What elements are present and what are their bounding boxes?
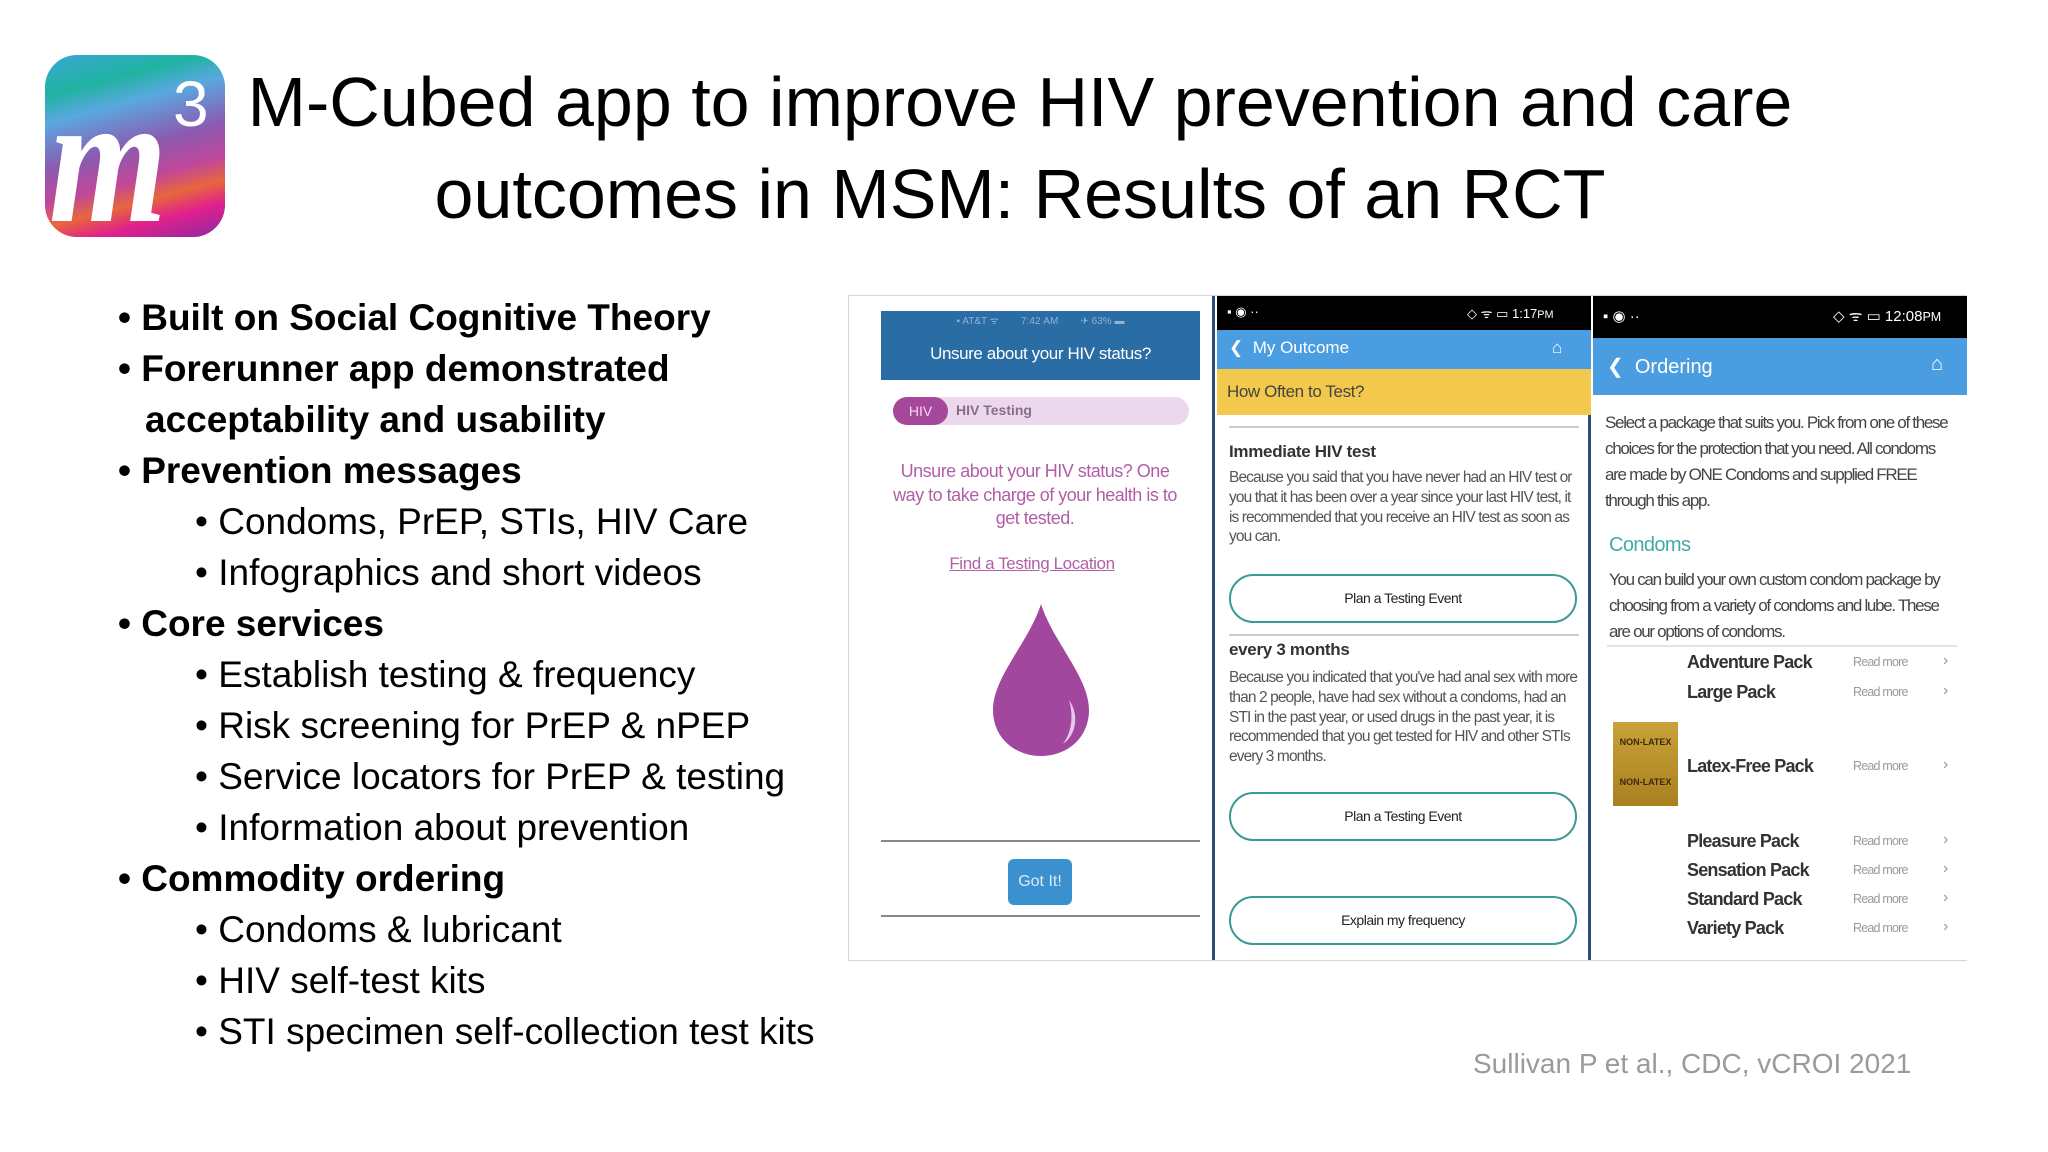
button: explain	[1229, 896, 1577, 945]
link: Find a Testing Location	[949, 554, 1115, 573]
title: outcomes in MSM: Results of an RCT	[435, 155, 1605, 233]
condom list: Sensation Pack	[1687, 860, 1809, 880]
condom list: Variety Pack	[1687, 918, 1783, 938]
condom list: ›	[1943, 652, 1948, 669]
title: M-Cubed app to improve HIV prevention and care	[248, 63, 1792, 141]
condom list: Read more	[1853, 655, 1908, 669]
bullet list: acceptability and usability	[145, 399, 606, 440]
button: got it: Got It!	[1018, 873, 1062, 890]
condom list: ›	[1943, 831, 1948, 848]
header bar	[881, 311, 1200, 380]
condom list: ›	[1943, 918, 1948, 935]
button: explain: Explain my frequency	[1341, 912, 1465, 928]
bullet list: • Commodity ordering	[118, 858, 505, 899]
button: plan 2: Plan a Testing Event	[1344, 808, 1462, 824]
condom list: ›	[1943, 860, 1948, 877]
condom list: ›	[1943, 756, 1948, 773]
screen 2: my outcome: every 3 months	[1229, 640, 1350, 659]
blue header: ❮ My Outcome	[1229, 338, 1349, 357]
logo: m3 app icon: 3	[173, 68, 209, 140]
screen 3: ordering: ▪ ◉ ··	[1603, 308, 1640, 325]
screen 3: ordering: ◇ ᯤ ▭ 12:08PM	[1833, 308, 1941, 325]
blue header: ⌂	[1552, 338, 1562, 357]
screen 3: ordering: Condoms	[1609, 534, 1690, 556]
screen 1: HIV testing	[849, 296, 1215, 960]
condom list: Read more	[1853, 759, 1908, 773]
condom list: Read more	[1853, 863, 1908, 877]
condom list: Read more	[1853, 892, 1908, 906]
icon: non-latex package	[1613, 722, 1678, 806]
condom list: Read more	[1853, 834, 1908, 848]
button: plan: Plan a Testing Event	[1344, 590, 1462, 606]
screen 3: ordering: You can build your own custom condom package by choosing from a variety of condoms and lube. These are our options of condoms.	[1609, 570, 1939, 641]
button: plan	[1229, 574, 1577, 623]
screen 2: my outcome: Because you indicated that you've had anal sex with more than 2 people, have had sex without a condoms, had an STI in the past year, or used drugs in the past year, it is recommended that you get tested for HIV and other STIs every 3 months.	[1229, 669, 1577, 765]
screen 3: ordering	[1593, 296, 1967, 960]
icon: non-latex package: NON-LATEX	[1620, 737, 1671, 747]
bullet list: • Information about prevention	[195, 807, 689, 848]
bullet list	[118, 297, 815, 1052]
blue header	[1217, 330, 1591, 369]
yellow section: How Often to Test?	[1227, 382, 1364, 401]
bullet list: • Condoms & lubricant	[195, 909, 562, 950]
bullet list: • Infographics and short videos	[195, 552, 702, 593]
panel: app screenshots	[848, 295, 1967, 961]
bullet list: • HIV self-test kits	[195, 960, 486, 1001]
bullet list: • Core services	[118, 603, 384, 644]
credit: Sullivan P et al., CDC, vCROI 2021	[1473, 1048, 1911, 1079]
bullet list: • STI specimen self-collection test kits	[195, 1011, 815, 1052]
title	[248, 63, 1792, 233]
icon: non-latex package: NON-LATEX	[1620, 777, 1671, 787]
pink message: Unsure about your HIV status? One way to take charge of your health is to get tested.	[893, 461, 1177, 528]
condom list: ›	[1943, 889, 1948, 906]
bullet list: • Risk screening for PrEP & nPEP	[195, 705, 750, 746]
condom list: Standard Pack	[1687, 889, 1802, 909]
bullet list: • Service locators for PrEP & testing	[195, 756, 785, 797]
pill: HIV	[909, 403, 932, 419]
icon: blood drop	[993, 604, 1089, 756]
pill: HIV Testing	[956, 402, 1032, 418]
header bar: ▪ AT&T ᯤ 7:42 AM ✈ 63% ▬	[957, 316, 1124, 327]
condom list: Large Pack	[1687, 682, 1775, 702]
screen 2: my outcome: Because you said that you have never had an HIV test or you that it has been over a year since your last HIV test, it is recommended that you receive an HIV test as soon as you can.	[1229, 469, 1572, 545]
bullet list: • Forerunner app demonstrated	[118, 348, 670, 389]
logo: m3 app icon	[45, 55, 225, 237]
screen 2: my outcome	[1217, 296, 1591, 960]
intro text: Select a package that suits you. Pick from one of these choices for the protection that you need. All condoms are made by ONE Condoms and supplied FREE through this app.	[1605, 413, 1947, 510]
condom list: Latex-Free Pack	[1687, 756, 1813, 776]
screen 2: my outcome: Immediate HIV test	[1229, 442, 1376, 461]
condom list: Read more	[1853, 685, 1908, 699]
condom list	[1613, 652, 1948, 938]
button: got it	[1008, 859, 1072, 905]
header bar: Unsure about your HIV status?	[930, 344, 1151, 363]
condom list: Read more	[1853, 921, 1908, 935]
condom list: Adventure Pack	[1687, 652, 1812, 672]
pill	[893, 397, 1189, 425]
blue header: ❮ Ordering	[1607, 356, 1713, 378]
bullet list: • Built on Social Cognitive Theory	[118, 297, 711, 338]
screen 2: my outcome: ◇ ᯤ ▭ 1:17PM	[1467, 306, 1554, 321]
bullet list: • Establish testing & frequency	[195, 654, 695, 695]
yellow section	[1217, 369, 1591, 415]
blue header: ⌂	[1931, 353, 1943, 375]
screen 2: my outcome: ▪ ◉ ··	[1227, 304, 1259, 319]
condom list: Pleasure Pack	[1687, 831, 1799, 851]
bullet list: • Prevention messages	[118, 450, 522, 491]
button: plan 2	[1229, 792, 1577, 841]
blue header	[1593, 338, 1967, 395]
bullet list: • Condoms, PrEP, STIs, HIV Care	[195, 501, 748, 542]
condom list: ›	[1943, 682, 1948, 699]
